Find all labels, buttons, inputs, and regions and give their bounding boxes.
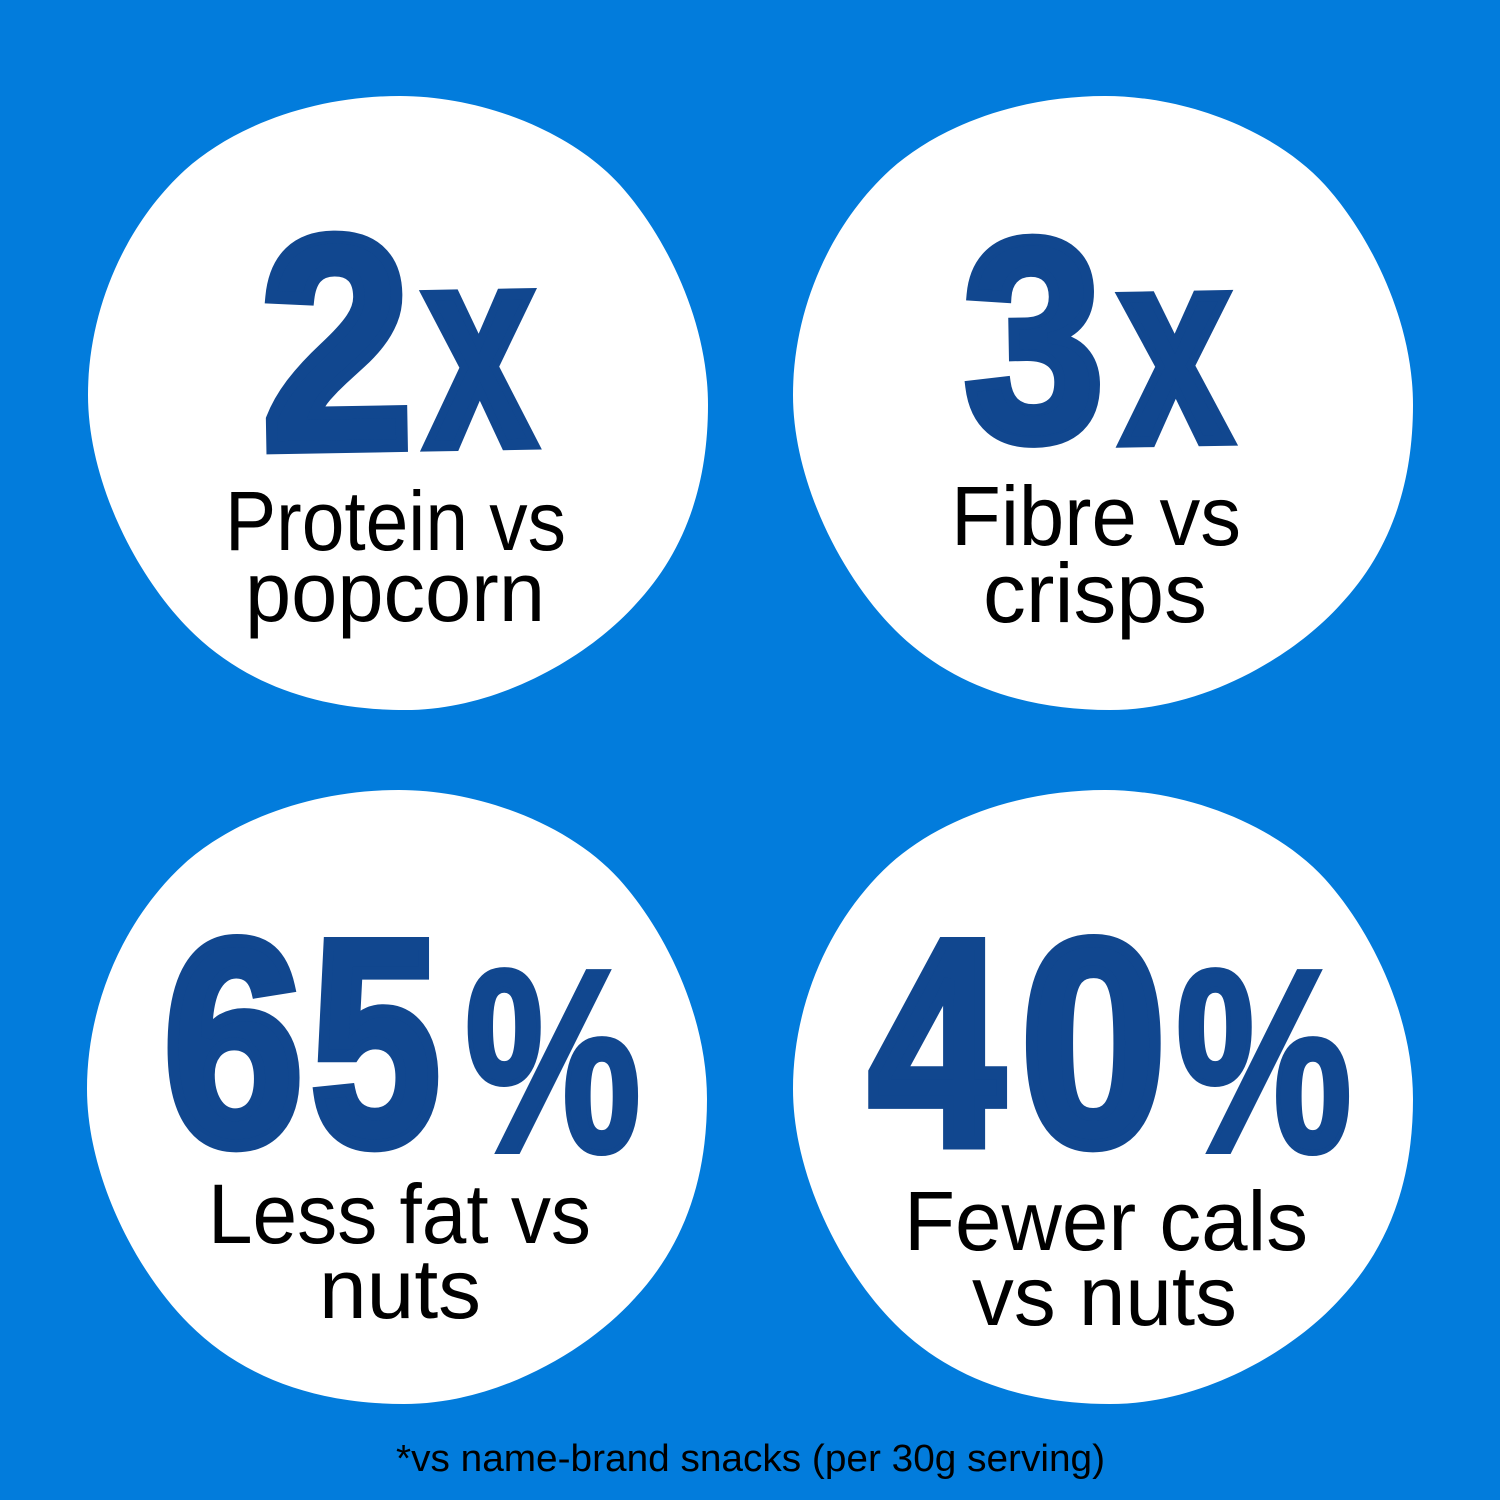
label: protein vs popcorn: Protein vs	[225, 474, 566, 568]
stat: 2x: x	[421, 187, 538, 507]
label: fewer cals vs nuts	[904, 1174, 1308, 1343]
label: fibre vs crisps: Fibre vs	[951, 469, 1241, 563]
panel: fibre	[793, 96, 1413, 710]
label: fibre vs crisps: crisps	[983, 546, 1207, 640]
stat: 65%: %	[465, 917, 641, 1207]
stat: 3x: x	[1117, 193, 1234, 501]
label: fewer cals vs nuts: vs nuts	[972, 1249, 1237, 1343]
stat: 3x: 3	[961, 180, 1106, 501]
label: fibre vs crisps	[951, 469, 1241, 640]
stat: 3x	[961, 178, 1234, 504]
panel: protein	[88, 96, 708, 710]
label: protein vs popcorn: popcorn	[245, 545, 545, 639]
stat: 40%: 4	[870, 881, 1005, 1205]
blob: fat	[87, 790, 707, 1404]
stat: 65%: 6	[164, 881, 303, 1205]
footnote: *vs name-brand snacks (per 30g serving)	[396, 1438, 1105, 1480]
panel: fat	[87, 790, 707, 1404]
label: less fat vs nuts: Less fat vs	[208, 1167, 591, 1261]
stat: 65%: 5	[312, 881, 440, 1205]
stat: 40%: 0	[1022, 881, 1166, 1205]
label: protein vs popcorn	[225, 474, 566, 639]
stat: 2x: 2	[258, 173, 414, 512]
blob: fibre	[793, 96, 1413, 710]
label: less fat vs nuts	[208, 1167, 591, 1336]
stat: 40%: %	[1176, 917, 1352, 1207]
blob: protein	[88, 96, 708, 710]
stat: 65%	[164, 881, 641, 1207]
stat: 2x	[258, 171, 538, 512]
panel: calories	[793, 790, 1413, 1404]
stat: 40%	[870, 881, 1352, 1207]
label: less fat vs nuts: nuts	[319, 1242, 481, 1336]
blob: calories	[793, 790, 1413, 1404]
label: fewer cals vs nuts: Fewer cals	[904, 1174, 1308, 1268]
